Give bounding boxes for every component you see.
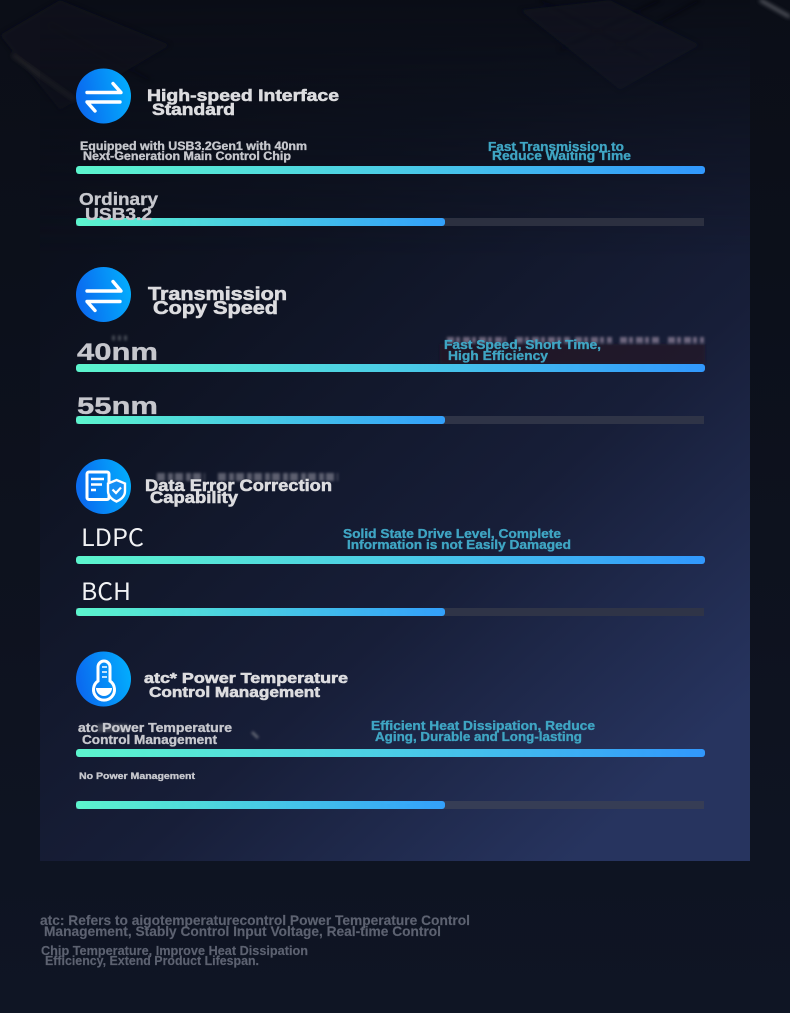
bar: full [76,166,705,174]
heading: Standard [152,100,235,119]
bar fill: no power [76,801,445,809]
callout: Fast Speed, Short Time, [444,337,601,352]
callout [343,526,571,552]
bar track: ordinary [76,218,704,226]
heading [148,283,287,318]
callout: High Efficiency [448,348,549,363]
heading: Copy Speed [153,297,278,318]
label: atc [78,721,232,747]
main panel [40,96,750,861]
heading: Control Management [149,684,320,701]
label: atc: Control Management [82,733,218,747]
label: BCH: BCH [81,572,131,607]
bar track: 55nm [76,416,704,424]
label: USB3.2Gen1: Equipped with USB3.2Gen1 with 40nm [80,141,307,153]
callout: Fast Transmission to [488,139,624,154]
footnote: Chip Temperature, Improve Heat Dissipation [41,943,308,958]
bar: full [76,749,705,757]
footnote [40,912,470,968]
heading [144,670,348,701]
label: ordinary: USB3.2 [85,204,152,224]
heading: Transmission [148,283,287,304]
footnote: Management, Stably Control Input Voltage, Real-time Control [44,923,441,939]
icon: transfer arrows [76,68,131,124]
heading: High-speed Interface [147,86,339,105]
heading [145,476,332,507]
icon: transfer arrows [76,267,131,322]
callout: Efficient Heat Dissipation, Reduce [371,718,595,733]
bar: full [76,364,705,372]
label: ordinary: Ordinary [79,189,158,209]
label: 40nm: 40nm [77,339,158,366]
label: no power management: No Power Management [79,771,196,782]
blurred artefact [112,338,705,364]
label: USB3.2Gen1 [80,141,307,163]
callout: Information is not Easily Damaged [347,537,571,552]
bar track: BCH [76,608,704,616]
section: high-speed interface [76,68,705,226]
bar fill: BCH [76,608,445,616]
label: LDPC: LDPC [81,518,144,553]
section: power temperature control [76,652,705,809]
callout [488,139,631,163]
label: ordinary [79,189,158,224]
section: data error correction [76,459,705,616]
icon: document shield [76,459,131,514]
callout: Solid State Drive Level, Complete [343,526,561,541]
bar track: no power [76,801,704,809]
callout [444,337,601,363]
label: USB3.2Gen1: Next-Generation Main Control Chip [83,151,291,163]
footnote: Efficiency, Extend Product Lifespan. [45,953,259,968]
bar fill: ordinary [76,218,445,226]
label: atc: atc Power Temperature [78,721,232,735]
heading: Data Error Correction [145,476,332,495]
footnote: atc: Refers to aigotemperaturecontrol Power Temperature Control [40,912,470,928]
heading: atc* Power Temperature [144,670,348,687]
icon: thermometer [76,652,131,706]
callout: Reduce Waiting Time [492,148,631,163]
heading: Capability [150,488,239,507]
background photo texture [0,0,790,110]
blurred artefact [97,728,258,738]
heading [147,86,339,119]
bar: full [76,556,705,564]
bar fill: 55nm [76,416,445,424]
callout: Aging, Durable and Long-lasting [375,729,582,744]
section: transmission copy speed [76,267,705,424]
blurred artefact [157,473,338,481]
label: 55nm: 55nm [77,393,158,420]
callout [371,718,595,744]
